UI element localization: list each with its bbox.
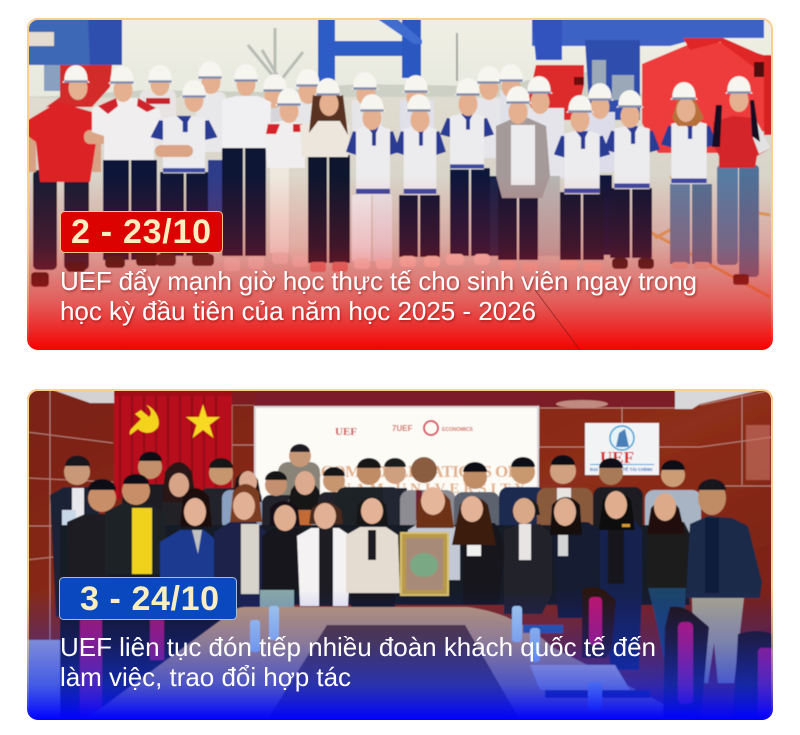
welcome screen: ECONOMICS xyxy=(442,427,474,433)
border card 2 xyxy=(28,390,772,719)
gradient overlay red xyxy=(27,175,773,350)
student polo 7 xyxy=(352,195,371,261)
delegation front row xyxy=(67,474,762,683)
water bottles xyxy=(250,606,602,710)
caption card 1 xyxy=(60,266,697,326)
welcome screen: UEF xyxy=(335,426,357,438)
student polo 9 xyxy=(450,168,469,256)
left chairs and floor xyxy=(27,605,230,720)
student polo 11 xyxy=(560,192,581,260)
welcome screen: WELCOME DELEGATIONS OF xyxy=(283,462,518,481)
caption card 2: làm việc, trao đổi hợp tác xyxy=(60,662,351,692)
woman black dress xyxy=(463,523,505,605)
student long hair xyxy=(308,155,327,263)
woman holding painting xyxy=(408,520,460,580)
man navy suit xyxy=(686,516,762,598)
ceiling xyxy=(53,391,115,404)
chairs xyxy=(582,587,773,720)
delegation back row xyxy=(50,444,701,617)
date badge 2 - 23/10: 2 - 23/10 xyxy=(71,213,211,251)
woman navy blazer xyxy=(214,522,266,612)
wall panels xyxy=(27,389,773,659)
flag backdrop xyxy=(114,389,232,499)
port cranes xyxy=(27,18,774,153)
student bag xyxy=(270,165,289,253)
woman jeans xyxy=(646,522,692,590)
woman dark blazer 1 xyxy=(504,524,552,614)
gradient overlay blue xyxy=(27,590,773,720)
photo: meeting room with delegation xyxy=(27,389,773,720)
woman black jacket xyxy=(262,528,303,590)
framed painting xyxy=(401,533,448,595)
caption card 1: học kỳ đầu tiên của năm học 2025 - 2026 xyxy=(60,296,536,326)
woman beige jacket xyxy=(346,527,400,593)
student white blouse xyxy=(222,148,243,256)
welcome screen: NAM UNIVERSITY xyxy=(340,481,525,497)
woman dark blazer 2 xyxy=(552,522,600,618)
student polo 12 xyxy=(610,188,630,258)
student red uniform xyxy=(717,165,738,265)
student polo jeans xyxy=(670,184,690,264)
border card 1 xyxy=(28,19,772,349)
ground markings xyxy=(650,177,770,297)
UEF sign: UEF xyxy=(600,448,634,467)
student polo 8 xyxy=(399,195,418,257)
woman white jacket xyxy=(297,528,351,606)
caption card 2: UEF liên tục đón tiếp nhiều đoàn khách quốc tế đến xyxy=(60,632,656,662)
student polo 3 xyxy=(160,172,184,256)
woman navy badge xyxy=(600,520,642,670)
photo: port scene with students xyxy=(27,18,774,350)
conference table xyxy=(85,607,695,720)
woman blue blazer xyxy=(160,530,216,580)
UEF sign: ĐẠI HỌC KINH TẾ TÀI CHÍNH xyxy=(590,465,652,472)
panel: card 2 international visit photo xyxy=(27,389,773,720)
student white shirt xyxy=(103,160,129,260)
student cardigan xyxy=(498,188,517,260)
panel: card 1 field trip photo xyxy=(27,18,774,350)
decorative crack xyxy=(535,290,580,350)
date badge 3 - 24/10: 3 - 24/10 xyxy=(80,580,219,618)
back row students xyxy=(140,61,615,256)
caption card 2 xyxy=(60,632,656,692)
man dark suit xyxy=(66,514,106,526)
welcome screen: 7UEF xyxy=(392,424,413,433)
front row students xyxy=(28,64,771,287)
dark backing behind front row xyxy=(60,525,690,605)
caption card 1: UEF đẩy mạnh giờ học thực tế cho sinh viên ngay trong xyxy=(60,266,697,296)
UEF sign xyxy=(585,423,659,475)
welcome screen xyxy=(255,407,538,502)
man yellow shirt xyxy=(104,504,123,526)
student red shirt xyxy=(33,170,57,270)
